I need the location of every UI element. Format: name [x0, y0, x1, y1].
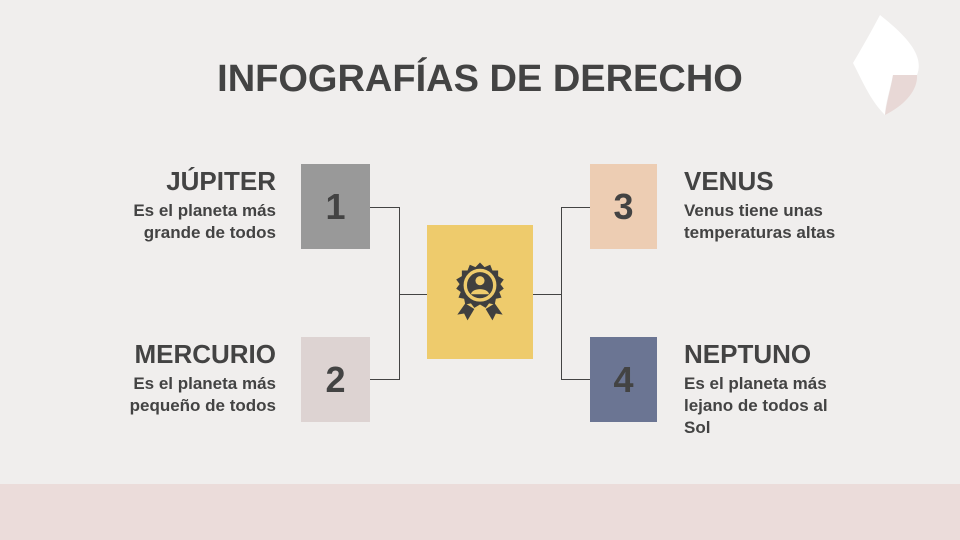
box 2: [301, 337, 370, 422]
text: Mercurio: pequeño de todos: [130, 396, 276, 415]
text: Mercurio: MERCURIO: [134, 339, 276, 369]
text: Neptuno: Es el planeta más: [684, 374, 827, 393]
text: Venus: VENUS: [684, 166, 774, 196]
text: Venus: temperaturas altas: [684, 223, 835, 242]
box 3: [590, 164, 657, 249]
text: Júpiter: Es el planeta más: [133, 201, 276, 220]
text: Neptuno: NEPTUNO: [684, 339, 811, 369]
box 4: 4: [613, 358, 634, 400]
text: Mercurio: Es el planeta más: [133, 374, 276, 393]
box 1: [301, 164, 370, 249]
text: Júpiter: JÚPITER: [166, 166, 276, 196]
text: Venus: [684, 166, 835, 242]
title: INFOGRAFÍAS DE DERECHO: [217, 58, 743, 100]
decorative leaf shape: [853, 15, 919, 115]
center box with award icon: [427, 225, 533, 359]
box 3: 3: [613, 186, 634, 226]
text: Mercurio: [130, 339, 276, 415]
text: Júpiter: grande de todos: [144, 223, 276, 242]
text: Neptuno: [684, 339, 828, 437]
text: Neptuno: Sol: [684, 418, 710, 437]
box 1: 1: [325, 186, 346, 226]
bottom band: [0, 484, 960, 540]
text: Neptuno: lejano de todos al: [684, 396, 828, 415]
text: Venus: Venus tiene unas: [684, 201, 823, 220]
text: Júpiter: [133, 166, 276, 242]
box 2: 2: [325, 358, 346, 400]
box 4: [590, 337, 657, 422]
